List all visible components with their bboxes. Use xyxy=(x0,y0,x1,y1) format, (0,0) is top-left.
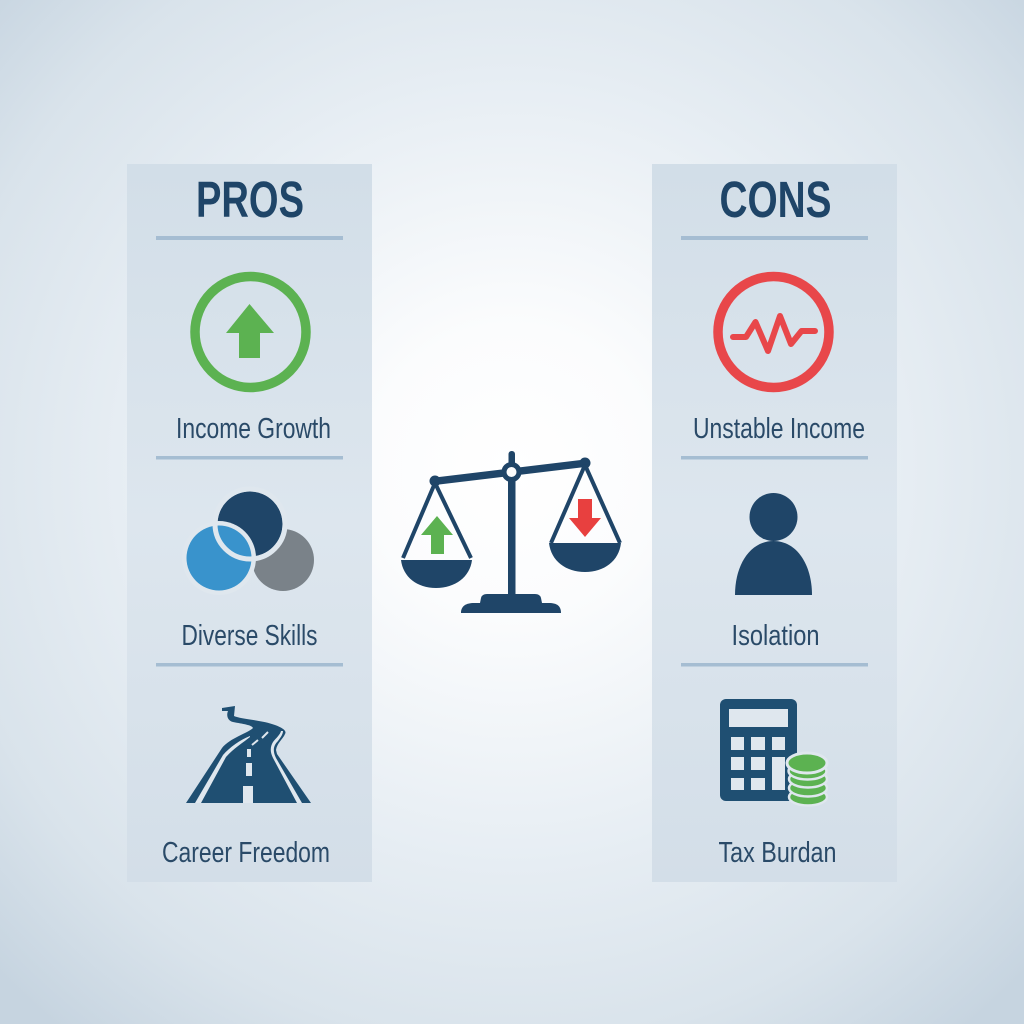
icon: income growth arrow in circle xyxy=(195,276,306,388)
icon: isolated person xyxy=(735,493,812,595)
label: isolation: Isolation xyxy=(732,620,820,652)
panel: pros xyxy=(127,164,372,882)
left pan xyxy=(401,483,472,588)
right pan xyxy=(549,465,621,572)
label: income growth: Income Growth xyxy=(176,413,331,445)
label: diverse skills: Diverse Skills xyxy=(182,620,318,652)
label: unstable income: Unstable Income xyxy=(693,413,865,445)
heading: pros: PROS xyxy=(196,171,304,228)
icon: diverse skills venn circles xyxy=(182,487,314,595)
icon: balance scale xyxy=(401,451,621,613)
icon: calculator and coins xyxy=(720,699,827,806)
label: career freedom: Career Freedom xyxy=(162,837,330,869)
icon: unstable income pulse in circle xyxy=(718,276,829,388)
coin stack xyxy=(787,753,827,806)
panel: cons xyxy=(652,164,897,882)
icon: winding road xyxy=(186,706,311,803)
label: tax burdan: Tax Burdan xyxy=(718,837,836,869)
heading: cons: CONS xyxy=(720,171,832,228)
